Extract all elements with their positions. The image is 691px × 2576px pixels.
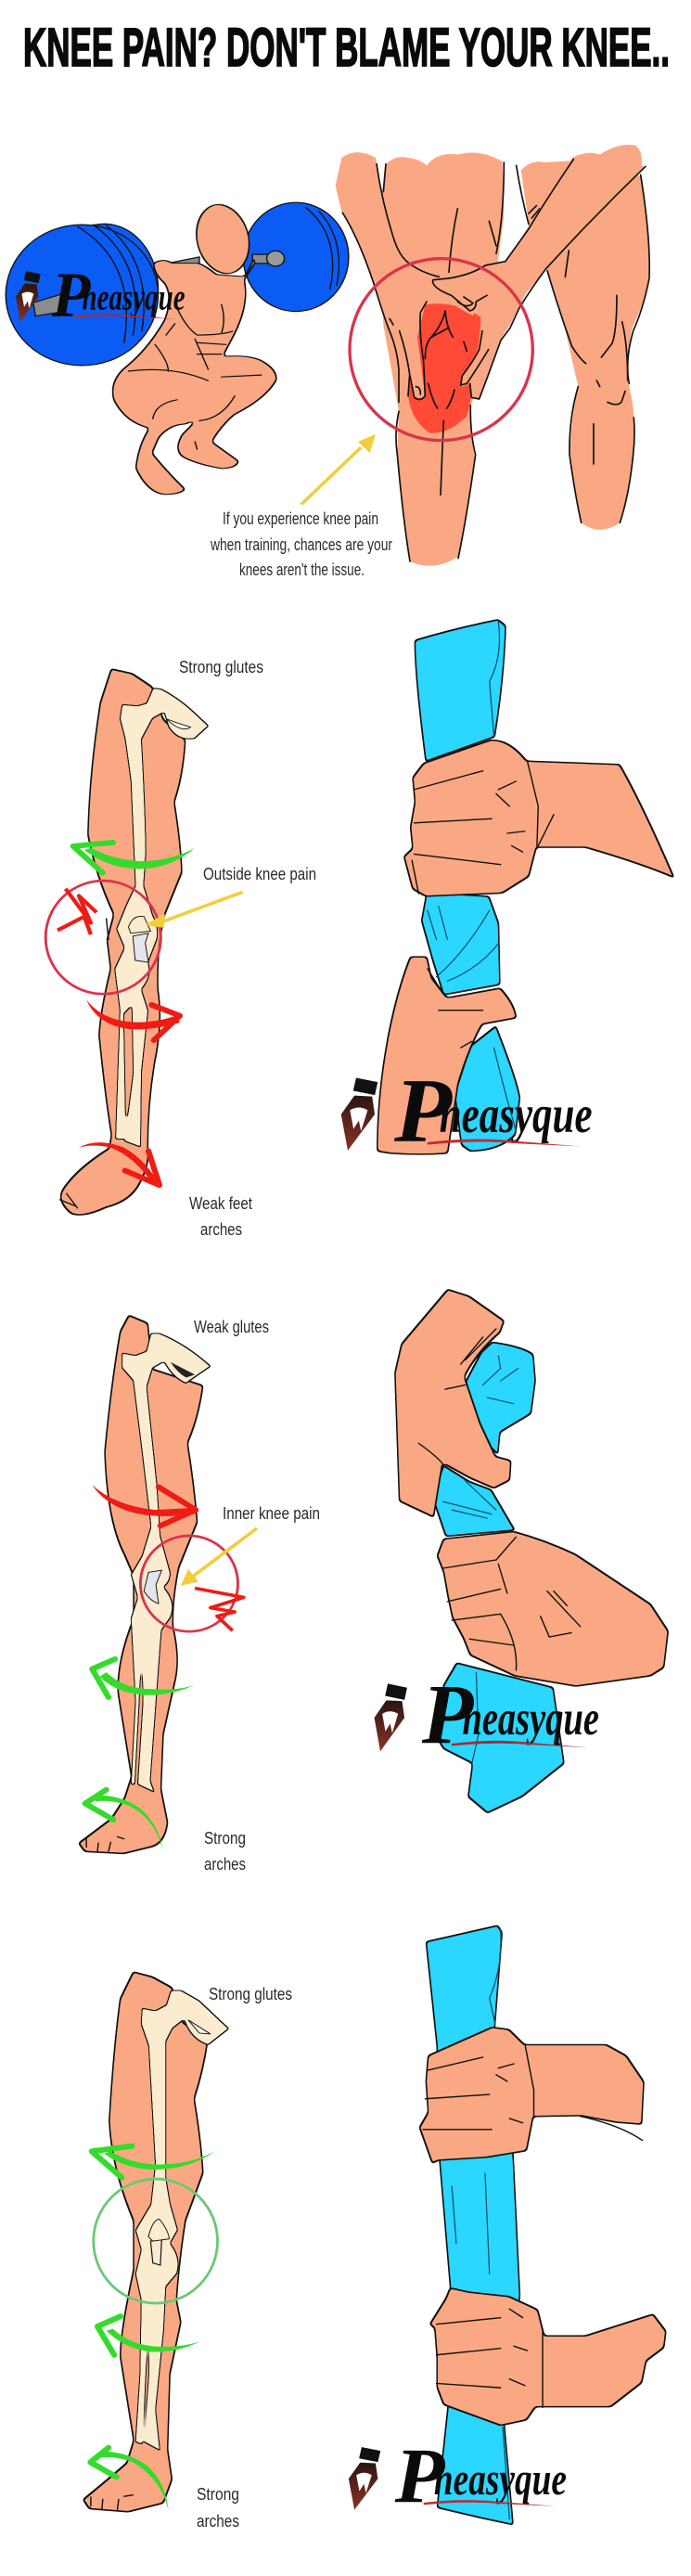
text: healthy knee labels: arches [197, 2512, 239, 2531]
logo: healthy panel: heasyque [434, 2454, 567, 2505]
text: outside knee labels: Outside knee pain [203, 865, 316, 883]
text: outside knee labels: Strong glutes [179, 658, 263, 676]
logo: healthy panel [349, 2432, 567, 2520]
text: inner knee labels [194, 1318, 320, 1874]
logo: inner knee panel: heasyque [462, 1691, 599, 1745]
yellow arrow [181, 1528, 257, 1586]
illustration: hands twisting towel inward [394, 1288, 669, 1814]
text: inner knee labels: Strong [204, 1829, 246, 1848]
green arrow: foot [90, 2448, 168, 2510]
right leg [517, 161, 649, 530]
red arrow: thigh [92, 1485, 196, 1526]
left arm and hand [336, 152, 452, 402]
text: squat caption: when training, chances are your [210, 535, 392, 554]
illustration: hands holding straight towel [418, 1925, 667, 2526]
illustration: hands twisting towel apart [377, 619, 675, 1155]
text: inner knee labels: Weak glutes [194, 1318, 269, 1336]
text: inner knee labels: arches [204, 1855, 246, 1874]
red pain mark [66, 889, 96, 922]
illustration: squatting lifter with barbell [6, 200, 349, 495]
green arrow: thigh [92, 2146, 215, 2178]
right arm and hand [431, 145, 646, 399]
illustration: leg with bones, outside knee pain [59, 668, 209, 1216]
text: healthy knee labels: Strong glutes [209, 1985, 292, 2003]
logo: inner knee panel: P [421, 1668, 475, 1762]
illustration: leg with bones, inner knee pain [78, 1314, 211, 1854]
green arrow: foot [85, 1790, 163, 1851]
logo: inner knee panel [375, 1668, 599, 1762]
panel: healthy knee [82, 1925, 667, 2531]
red pain mark lower [58, 917, 91, 934]
red arrow: foot [79, 1142, 160, 1185]
leg contour lines [383, 162, 504, 561]
text: outside knee labels: Weak feet [189, 1194, 252, 1213]
red circle on knee [350, 259, 532, 441]
pain area [408, 303, 480, 433]
text: outside knee labels [179, 658, 316, 1239]
text: squat caption [210, 509, 392, 579]
logo: squat panel [16, 260, 186, 330]
green circle: healthy knee [94, 2179, 218, 2303]
middle leg [380, 153, 504, 566]
illustration: hands gripping painful knee [336, 145, 649, 566]
text: healthy knee labels [197, 1985, 292, 2531]
red arrow: shin [86, 999, 180, 1040]
logo: squat panel: heasyque [82, 277, 186, 317]
text: inner knee labels: Inner knee pain [223, 1504, 320, 1523]
red pain mark [195, 1589, 244, 1630]
green arrow: thigh [73, 843, 195, 873]
red circle: inner knee [140, 1536, 237, 1631]
logo: outside knee panel [341, 1061, 593, 1162]
logo: outside knee panel: heasyque [440, 1085, 593, 1144]
text: squat caption: If you experience knee pain [223, 509, 378, 528]
panel: outside knee pain [45, 619, 675, 1239]
green arrow: shin [97, 2316, 199, 2355]
logo: squat panel: P [51, 260, 92, 330]
panel: squat and knee pain [6, 145, 649, 579]
text: outside knee labels: arches [200, 1220, 242, 1239]
green arrow: shin [92, 1659, 195, 1697]
text: healthy knee labels: Strong [197, 2485, 239, 2504]
yellow arrow [146, 892, 243, 928]
panel: inner knee pain [78, 1288, 669, 1874]
logo: healthy panel: P [394, 2432, 446, 2520]
logo: outside knee panel: P [393, 1061, 453, 1162]
red circle: outside knee [45, 881, 160, 994]
illustration: leg with bones, healthy alignment [82, 1971, 229, 2513]
yellow arrow [301, 434, 376, 505]
text: squat caption: knees aren't the issue. [239, 560, 365, 579]
